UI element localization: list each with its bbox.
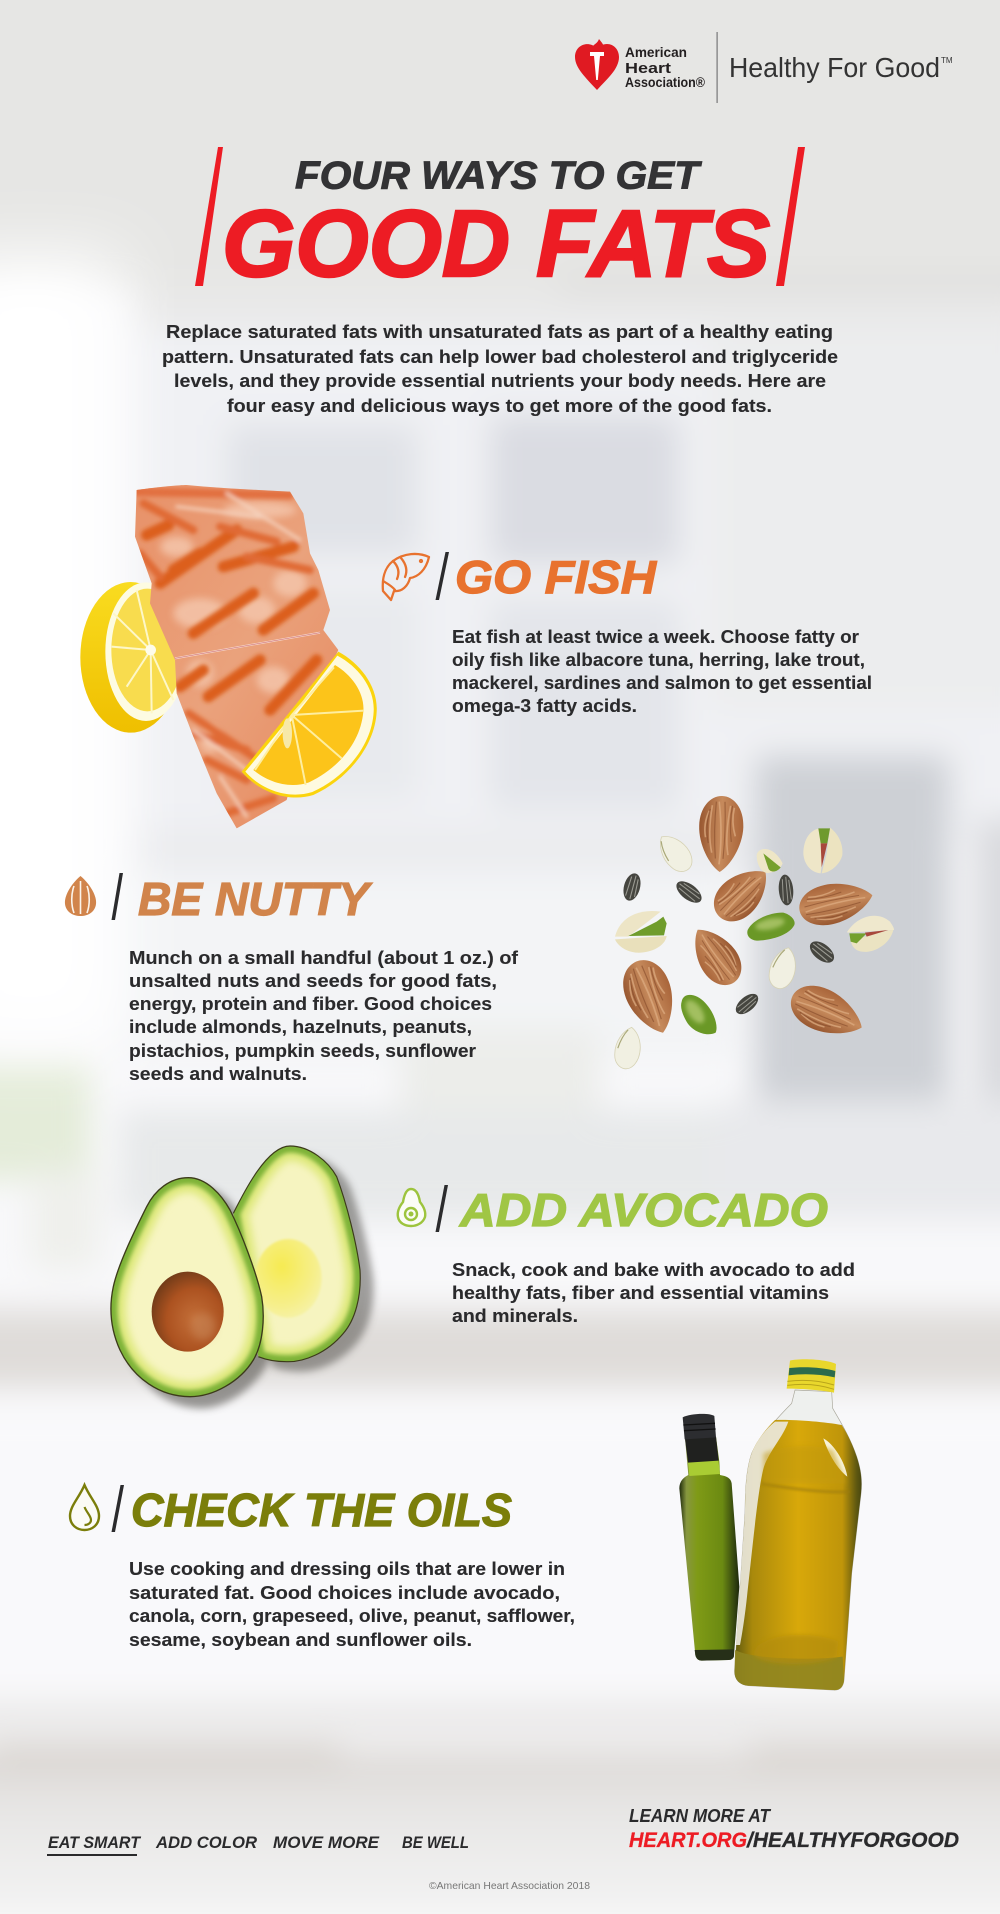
footer navigation: BE WELL <box>402 1833 469 1852</box>
heading: add avocado: ADD AVOCADO <box>459 1184 828 1236</box>
organisation name <box>625 45 705 90</box>
body text: healthy fats, fiber and essential vitamins <box>452 1282 829 1303</box>
call to action: learn more: HEART.ORG <box>629 1829 747 1852</box>
body text: sesame, soybean and sunflower oils. <box>129 1629 472 1650</box>
heading: be nutty: BE NUTTY <box>138 873 373 925</box>
body text: saturated fat. Good choices include avocado, <box>129 1582 560 1603</box>
call to action: learn more <box>629 1806 959 1852</box>
body text: include almonds, hazelnuts, peanuts, <box>129 1016 472 1037</box>
illustration: salmon with lemon <box>80 480 377 833</box>
body text: canola, corn, grapeseed, olive, peanut, safflower, <box>129 1605 575 1626</box>
right lemon wedge <box>242 652 377 798</box>
avocado half: back <box>233 1146 360 1362</box>
organisation name: Heart <box>625 60 671 77</box>
body text: omega-3 fatty acids. <box>452 695 637 716</box>
icon: heart and torch <box>575 39 619 90</box>
icon: avocado <box>398 1189 425 1226</box>
title <box>195 147 805 297</box>
body text: Snack, cook and bake with avocado to add <box>452 1259 855 1280</box>
copyright: ©American Heart Association 2018 <box>429 1880 590 1892</box>
intro paragraph: pattern. Unsaturated fats can help lower bad cholesterol and triglyceride <box>162 346 838 367</box>
illustration: oil bottles <box>679 1359 861 1690</box>
intro paragraph: four easy and delicious ways to get more of the good fats. <box>227 395 772 416</box>
pistachios and kernels <box>615 828 894 1034</box>
body text: energy, protein and fiber. Good choices <box>129 993 492 1014</box>
footer navigation: ADD COLOR <box>155 1833 258 1852</box>
panel: check the oils <box>70 1359 861 1690</box>
heading: check the oils: CHECK THE OILS <box>131 1484 512 1536</box>
intro paragraph: levels, and they provide essential nutrients your body needs. Here are <box>174 370 826 391</box>
body text: unsalted nuts and seeds for good fats, <box>129 970 497 991</box>
salmon fillet <box>135 485 338 828</box>
call to action: learn more: LEARN MORE AT <box>629 1806 772 1826</box>
body text: and minerals. <box>452 1305 578 1326</box>
icon: fish <box>383 554 429 600</box>
body text <box>452 1259 855 1326</box>
organisation name: American <box>625 45 687 60</box>
panel: go fish <box>80 480 872 833</box>
wordmark: Healthy For Good: TM <box>941 56 953 65</box>
footer navigation: EAT SMART <box>48 1833 142 1852</box>
wordmark: Healthy For Good: Healthy For Good <box>729 52 940 83</box>
body text: Munch on a small handful (about 1 oz.) of <box>129 947 519 968</box>
heading: go fish: GO FISH <box>455 551 657 603</box>
small dark bottle <box>679 1414 739 1661</box>
left lemon slice <box>80 582 187 733</box>
panel: be nutty <box>65 795 894 1084</box>
logo: American Heart Association <box>575 32 953 103</box>
icon: almond <box>65 876 96 916</box>
organisation name: Association® <box>625 75 705 90</box>
body text <box>129 947 519 1084</box>
body text: oily fish like albacore tuna, herring, lake trout, <box>452 649 865 670</box>
title line: four ways to get: FOUR WAYS TO GET <box>295 154 702 198</box>
body text: Eat fish at least twice a week. Choose fatty or <box>452 626 859 647</box>
icon: oil drop <box>70 1485 99 1530</box>
body text: Use cooking and dressing oils that are lower in <box>129 1558 565 1579</box>
title line: good fats: GOOD FATS <box>222 191 770 297</box>
body text: pistachios, pumpkin seeds, sunflower <box>129 1040 476 1061</box>
body text <box>452 626 872 716</box>
body text: seeds and walnuts. <box>129 1063 307 1084</box>
large oil bottle <box>735 1359 861 1690</box>
footer navigation: MOVE MORE <box>273 1833 380 1852</box>
illustration: nuts and seeds <box>612 795 894 1071</box>
avocado half: front <box>111 1178 263 1397</box>
illustration: avocado halves <box>111 1146 374 1408</box>
footer navigation <box>47 1833 469 1856</box>
intro paragraph: Replace saturated fats with unsaturated fats as part of a healthy eating <box>166 321 833 342</box>
body text: mackerel, sardines and salmon to get essential <box>452 672 872 693</box>
call to action: learn more: /HEALTHYFORGOOD <box>746 1829 959 1852</box>
intro paragraph <box>162 321 838 416</box>
body text <box>129 1558 575 1650</box>
panel: add avocado <box>111 1146 855 1408</box>
